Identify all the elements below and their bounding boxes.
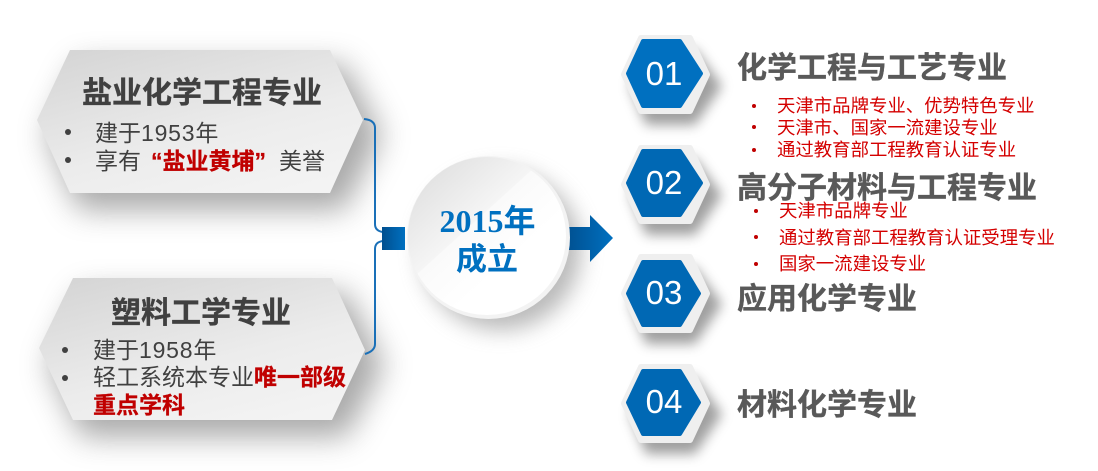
heading: salt chemical engineering: 盐业化学工程专业 [82,77,322,110]
bullet list: salt major facts [65,120,325,174]
hexagon badge 01 [624,38,722,125]
arrow [565,215,613,262]
list: polymer honours [754,200,1055,274]
hexagon badge 04 [624,367,722,454]
panel: salt chemical engineering major [37,50,382,210]
list: chemical engineering honours: 天津市品牌专业、优势特色专业 [777,95,1034,116]
bullet list: salt major facts: 享有 [95,148,141,174]
hexagon badge 01: 01 [646,55,682,92]
circle: founded 2015 [407,156,570,319]
list: polymer honours: 天津市品牌专业 [779,200,908,221]
bullet list: plastics major facts [62,337,346,418]
bullet list: salt major facts: 建于1953年 [95,120,218,146]
bullet list: salt major facts: 美誉 [279,148,325,174]
list: polymer honours: 通过教育部工程教育认证受理专业 [779,227,1055,248]
heading: chemical engineering and technology: 化学工程与工艺专业 [737,52,1007,85]
hexagon badge 02 [624,148,722,235]
bullet list: salt major facts: “盐业黄埔” [151,148,266,174]
bullet list: plastics major facts: 重点学科 [93,392,185,418]
bullet list: plastics major facts: 建于1958年 [93,337,216,363]
hexagon badge 03: 03 [646,274,682,311]
list: chemical engineering honours: 天津市、国家一流建设专业 [777,117,998,138]
bracket connector [364,119,383,354]
heading: plastics engineering: 塑料工学专业 [111,297,291,330]
heading: applied chemistry: 应用化学专业 [737,283,917,316]
hexagon badge 02: 02 [646,164,682,201]
heading: materials chemistry: 材料化学专业 [737,389,917,422]
hexagon badge 03 [624,257,722,344]
year label: 2015年 [440,196,536,242]
hexagon badge 04: 04 [646,383,682,420]
list: chemical engineering honours: 通过教育部工程教育认证专业 [777,139,1016,160]
list: polymer honours: 国家一流建设专业 [779,253,926,274]
founded label: 成立 [456,242,518,277]
bullet list: plastics major facts: 轻工系统本专业唯一部级 [93,364,346,390]
heading: polymer materials and engineering: 高分子材料与工程专业 [737,172,1037,205]
connector square [382,227,405,250]
list: chemical engineering honours [752,95,1034,160]
panel: plastics engineering major [39,278,384,437]
